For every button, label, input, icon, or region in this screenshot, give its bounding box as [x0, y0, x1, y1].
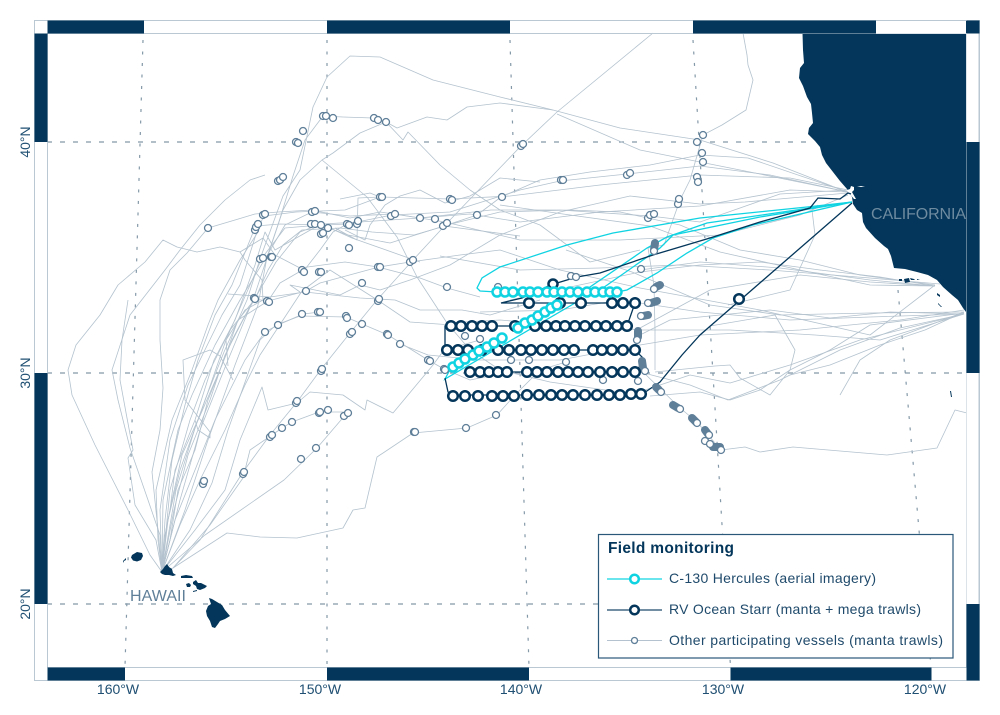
label: California: CALIFORNIA [871, 206, 966, 223]
legend title: Field monitoring [608, 540, 734, 557]
legend: other vessels: Other participating vessels (manta trawls) [669, 632, 943, 648]
offshore islands and bay [847, 186, 952, 397]
land: California coast [799, 20, 979, 373]
stations: C-130 Hercules [448, 288, 622, 372]
longitude labels: 120°W [904, 681, 947, 697]
longitude labels: 140°W [500, 681, 543, 697]
latitude labels: 20°N [17, 588, 33, 620]
sampling dense clusters [638, 243, 720, 447]
stations: RV Ocean Starr [442, 280, 744, 401]
Hawaiian islands [123, 552, 230, 628]
longitude labels [97, 681, 947, 697]
stations: other vessels [200, 112, 724, 488]
route: RV Ocean Starr [445, 193, 852, 395]
latitude labels [17, 126, 33, 620]
route: C-130 Hercules flight lines [445, 202, 852, 379]
legend: RV Ocean Starr: RV Ocean Starr (manta + mega trawls) [669, 601, 921, 617]
tracks: other participating vessels [68, 33, 967, 572]
latitude labels: 30°N [17, 357, 33, 389]
longitude labels: 160°W [97, 681, 140, 697]
legend: C-130 Hercules: C-130 Hercules (aerial imagery) [669, 570, 876, 586]
legend panel [598, 534, 953, 658]
longitude labels: 130°W [702, 681, 745, 697]
latitude labels: 40°N [17, 126, 33, 158]
label: Hawaii: HAWAII [130, 588, 186, 605]
longitude labels: 150°W [299, 681, 342, 697]
